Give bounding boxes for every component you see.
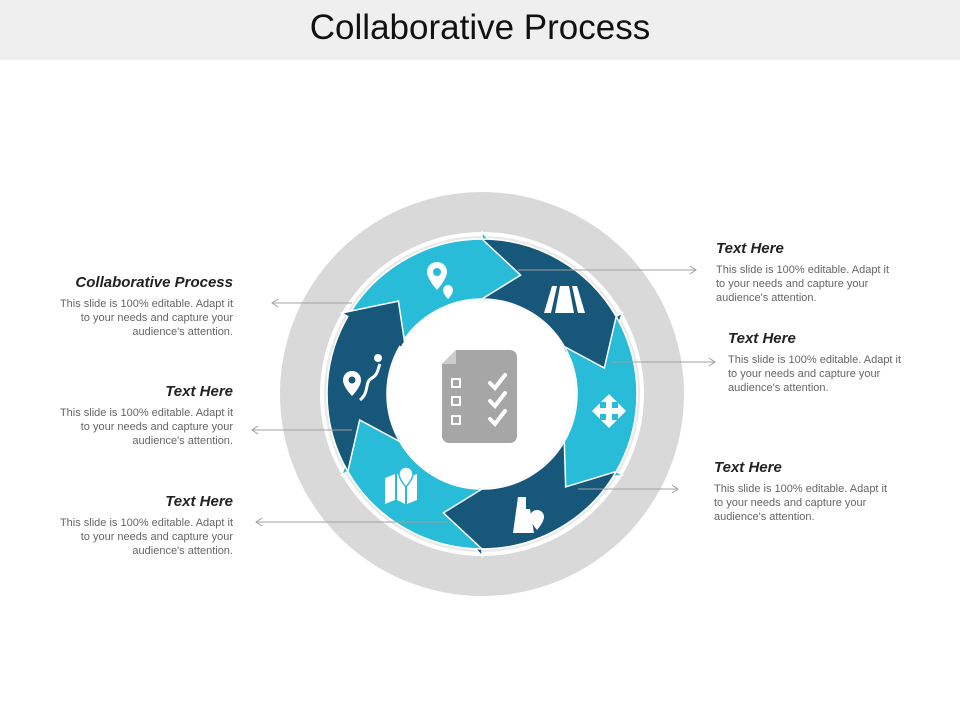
icon: folded map with pin [385, 467, 417, 504]
text: right bottom: This slide is 100% editable. Adapt it to your needs and capture your audience's attention. [714, 483, 887, 523]
callout lines [252, 266, 715, 526]
icon: road [544, 286, 585, 313]
text: right middle [728, 330, 901, 394]
text: right top [716, 240, 889, 304]
text: right bottom: Text Here [714, 459, 782, 476]
icon: road with pin [513, 497, 544, 533]
text: left middle: This slide is 100% editable. Adapt it to your needs and capture your audience's attention. [60, 407, 233, 447]
arrow segments [324, 213, 640, 575]
text: left middle: Text Here [165, 383, 233, 400]
icon: map pins [427, 262, 453, 299]
text: left bottom [60, 493, 233, 557]
text: right middle: This slide is 100% editable. Adapt it to your needs and capture your audience's attention. [728, 354, 901, 394]
text: collaborative process: Collaborative Process [75, 274, 233, 291]
icon: route pins [343, 354, 382, 400]
text: right top: This slide is 100% editable. Adapt it to your needs and capture your audience's attention. [716, 264, 889, 304]
title: Collaborative Process [310, 8, 650, 47]
text: collaborative process [60, 274, 233, 338]
icon: move arrows [592, 394, 626, 428]
icon: checklist document [442, 350, 517, 443]
text: left middle [60, 383, 233, 447]
text: right middle: Text Here [728, 330, 796, 347]
text: right top: Text Here [716, 240, 784, 257]
title bar [0, 0, 960, 60]
text: collaborative process: This slide is 100% editable. Adapt it to your needs and capture your audience's attention. [60, 298, 233, 338]
outer gray ring [280, 192, 684, 596]
text: left bottom: This slide is 100% editable. Adapt it to your needs and capture your audience's attention. [60, 517, 233, 557]
text: right bottom [714, 459, 887, 523]
text: left bottom: Text Here [165, 493, 233, 510]
inner white circle [388, 300, 576, 488]
